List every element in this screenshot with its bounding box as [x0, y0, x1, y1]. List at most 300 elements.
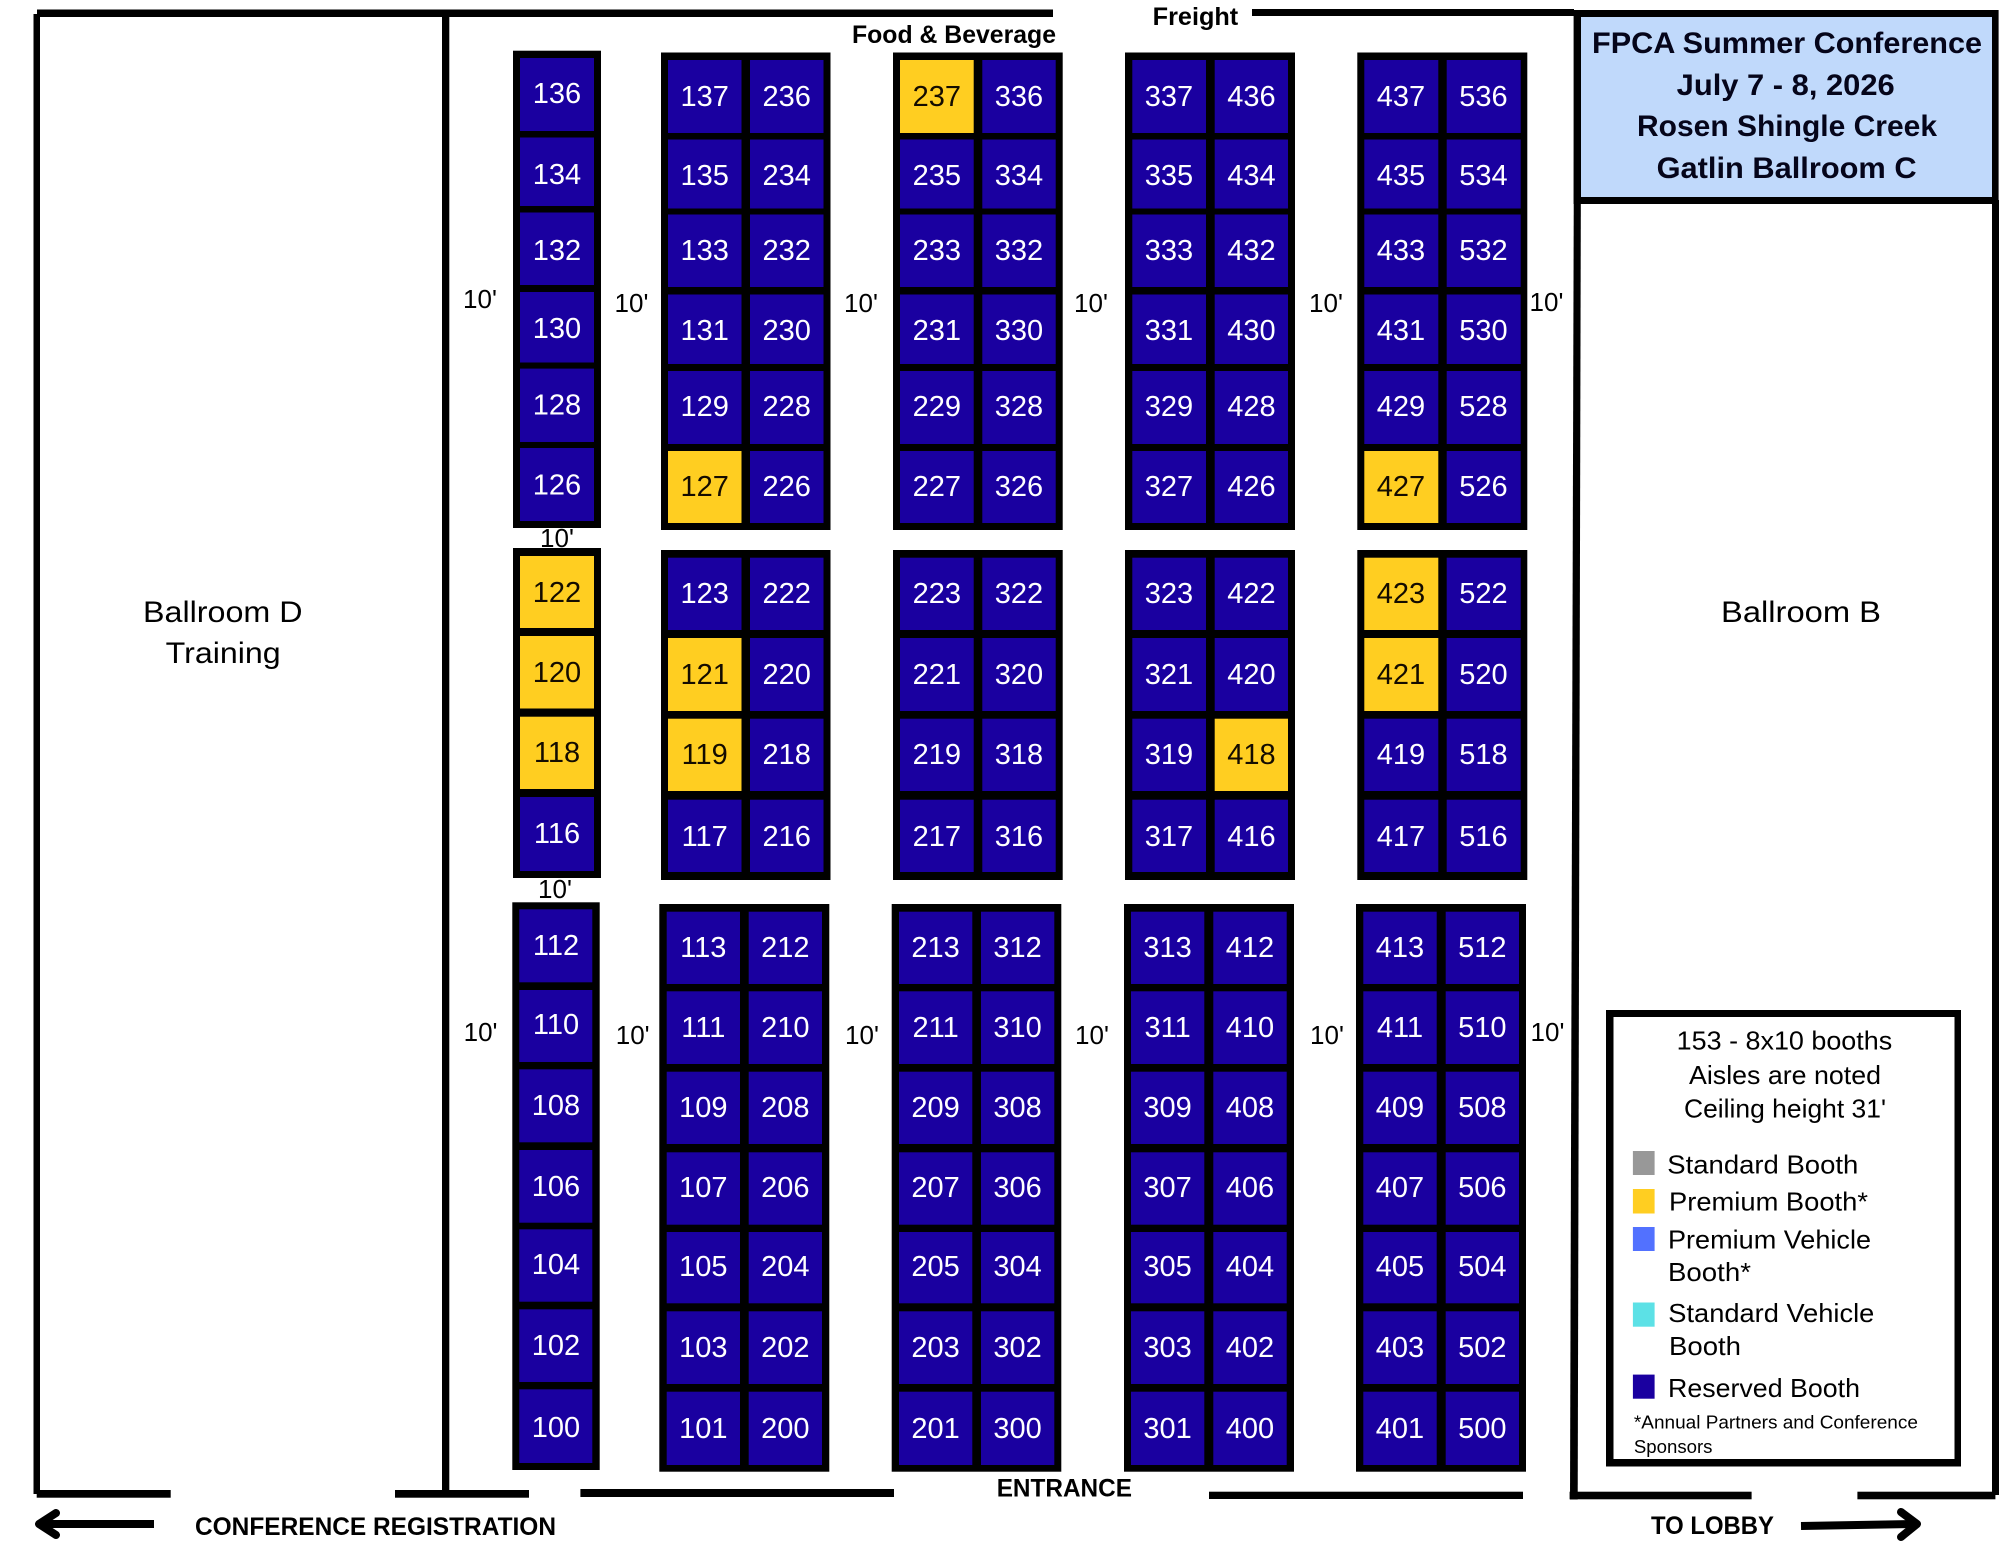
booth 337: 337 — [1145, 81, 1193, 113]
booth 235 — [900, 140, 974, 208]
booth 305: 305 — [1143, 1251, 1192, 1283]
booth block: top 3 — [1125, 52, 1295, 530]
aisle labels: 10' — [1531, 1017, 1564, 1047]
booth 312 — [981, 912, 1054, 984]
booth 506 — [1446, 1152, 1519, 1225]
booth 319 — [1132, 719, 1206, 791]
booth 327: 327 — [1145, 471, 1193, 503]
booth column: bottom single — [512, 902, 600, 1470]
booth 116 — [520, 797, 594, 871]
booth 322: 322 — [995, 578, 1043, 610]
booth 108 — [519, 1069, 592, 1142]
booth 222 — [750, 558, 824, 630]
booth 508: 508 — [1458, 1092, 1506, 1124]
booth 104 — [519, 1229, 592, 1302]
booth 220 — [750, 638, 824, 711]
booth 327 — [1132, 451, 1206, 523]
booth 510 — [1446, 991, 1519, 1064]
legend notes: 153 - 8x10 booths — [1677, 1026, 1892, 1056]
booth 307: 307 — [1143, 1172, 1192, 1204]
booth 432: 432 — [1227, 235, 1276, 267]
aisle labels: 10' — [538, 874, 572, 904]
booth 405: 405 — [1376, 1251, 1424, 1283]
booth 236 — [750, 60, 824, 133]
booth 331: 331 — [1145, 315, 1193, 347]
booth 409: 409 — [1376, 1092, 1424, 1124]
booth 528 — [1447, 371, 1521, 444]
booth 326: 326 — [995, 471, 1043, 503]
booth 134: 134 — [533, 159, 581, 191]
booth 504 — [1446, 1232, 1519, 1303]
booth 427 premium: 427 — [1377, 471, 1425, 503]
booth 200: 200 — [761, 1413, 809, 1445]
booth 526 — [1447, 451, 1521, 523]
booth 329: 329 — [1145, 391, 1193, 423]
booth 412 — [1213, 912, 1287, 984]
booth 528: 528 — [1459, 391, 1508, 423]
booth 305 — [1131, 1232, 1204, 1303]
booth 404 — [1213, 1232, 1287, 1303]
booth 106: 106 — [532, 1171, 580, 1203]
booth 331 — [1132, 294, 1206, 364]
booth 318: 318 — [995, 739, 1043, 771]
title line 3: Rosen Shingle Creek — [1637, 110, 1937, 143]
booth 431: 431 — [1377, 315, 1425, 347]
booth 518 — [1447, 719, 1521, 791]
booth 236: 236 — [763, 81, 811, 113]
booth 522: 522 — [1459, 578, 1508, 610]
booth 433 — [1364, 214, 1438, 287]
aisle labels: 10' — [463, 284, 497, 314]
booth 300 — [981, 1392, 1054, 1465]
booth block: bottom 3 — [1124, 904, 1294, 1472]
booth 417 — [1364, 800, 1438, 872]
title panel — [1574, 10, 1999, 204]
booth 136 — [520, 58, 594, 131]
booth 307 — [1131, 1152, 1204, 1225]
booth 111 — [667, 991, 740, 1064]
booth 427 premium — [1364, 451, 1438, 523]
booth 111: 111 — [681, 1012, 725, 1044]
booth 435: 435 — [1377, 160, 1425, 192]
booth 402 — [1213, 1311, 1287, 1384]
booth 421 premium: 421 — [1377, 659, 1425, 691]
booth 105: 105 — [679, 1251, 727, 1283]
booth 330: 330 — [995, 315, 1043, 347]
booth 227 — [900, 451, 974, 523]
legend item: standard vehicle booth — [1633, 1298, 1874, 1361]
booth 420: 420 — [1227, 659, 1276, 691]
booth 218 — [750, 719, 824, 791]
booth 534 — [1447, 140, 1521, 208]
booth 309: 309 — [1143, 1092, 1192, 1124]
booth 420 — [1215, 638, 1288, 711]
booth 135: 135 — [681, 160, 729, 192]
booth 320 — [982, 638, 1056, 711]
booth 403 — [1363, 1311, 1437, 1384]
legend panel — [1606, 1010, 1961, 1466]
booth 534: 534 — [1459, 160, 1508, 192]
booth 334 — [982, 140, 1056, 208]
booth 401: 401 — [1376, 1413, 1424, 1445]
booth 234 — [750, 140, 824, 208]
booth 212 — [749, 912, 822, 984]
booth block: bottom 4 — [1356, 904, 1526, 1472]
booth block: bottom 2 — [892, 904, 1061, 1472]
booth 416 — [1215, 800, 1288, 872]
booth 120 premium: 120 — [533, 657, 581, 689]
booth 103: 103 — [679, 1332, 727, 1364]
booth 312: 312 — [993, 932, 1042, 964]
booth 126: 126 — [533, 470, 581, 502]
booth 200 — [749, 1392, 822, 1465]
booth 316 — [982, 800, 1056, 872]
booth 313 — [1131, 912, 1204, 984]
booth 223: 223 — [913, 578, 961, 610]
booth 516 — [1447, 800, 1521, 872]
booth 335: 335 — [1145, 160, 1193, 192]
booth 333: 333 — [1145, 235, 1193, 267]
booth 205 — [899, 1232, 972, 1303]
booth 401 — [1363, 1392, 1437, 1465]
booth 400: 400 — [1226, 1413, 1274, 1445]
booth 526: 526 — [1459, 471, 1508, 503]
booth column: middle single — [513, 548, 601, 878]
booth 216 — [750, 800, 824, 872]
booth 326 — [982, 451, 1056, 523]
booth block: middle 3 — [1125, 550, 1295, 880]
booth 434: 434 — [1227, 160, 1276, 192]
booth 434 — [1215, 140, 1288, 208]
booth block: middle 1 — [661, 550, 830, 880]
booth 137 — [668, 60, 742, 133]
booth 428: 428 — [1227, 391, 1276, 423]
arrow: to lobby — [1801, 1512, 1917, 1537]
booth 219: 219 — [913, 739, 961, 771]
booth 107: 107 — [679, 1172, 727, 1204]
booth 334: 334 — [995, 160, 1043, 192]
legend footnote: Sponsors — [1634, 1437, 1712, 1457]
booth 302: 302 — [993, 1332, 1042, 1364]
aisle labels: 10' — [1530, 287, 1563, 317]
booth 502 — [1446, 1311, 1519, 1384]
booth 330 — [982, 294, 1056, 364]
booth 121 premium: 121 — [681, 659, 729, 691]
booth 209: 209 — [911, 1092, 960, 1124]
booth block: middle 4 — [1357, 550, 1527, 880]
booth 404: 404 — [1226, 1251, 1274, 1283]
booth 132 — [520, 212, 594, 285]
booth 207: 207 — [911, 1172, 960, 1204]
booth 512: 512 — [1458, 932, 1506, 964]
booth 303 — [1131, 1311, 1204, 1384]
booth 522 — [1447, 558, 1521, 630]
booth 101 — [667, 1392, 740, 1465]
label: Ballroom D Training: Training — [166, 637, 281, 670]
booth 128 — [520, 369, 594, 442]
booth 230: 230 — [763, 315, 811, 347]
booth 216: 216 — [763, 821, 811, 853]
booth 308: 308 — [993, 1092, 1042, 1124]
booth 335 — [1132, 140, 1206, 208]
booth 130: 130 — [533, 313, 581, 345]
booth 403: 403 — [1376, 1332, 1424, 1364]
booth 211: 211 — [912, 1012, 959, 1044]
booth 313: 313 — [1143, 932, 1192, 964]
booth 229 — [900, 371, 974, 444]
legend item: premium vehicle booth — [1633, 1224, 1871, 1287]
aisle labels: 10' — [616, 1020, 650, 1050]
booth 119 premium: 119 — [682, 739, 728, 771]
label: to lobby: TO LOBBY — [1651, 1512, 1774, 1540]
legend item: reserved booth: Reserved Booth — [1668, 1373, 1860, 1403]
booth 229: 229 — [913, 391, 961, 423]
booth 300: 300 — [993, 1413, 1042, 1445]
booth 222: 222 — [763, 578, 811, 610]
booth 319: 319 — [1145, 739, 1193, 771]
legend notes: Ceiling height 31' — [1684, 1094, 1886, 1124]
booth 530: 530 — [1459, 315, 1508, 347]
booth 208: 208 — [761, 1092, 809, 1124]
booth 317: 317 — [1145, 821, 1193, 853]
booth 219 — [900, 719, 974, 791]
booth 202: 202 — [761, 1332, 809, 1364]
booth 116: 116 — [534, 818, 580, 850]
booth 122 premium: 122 — [533, 577, 581, 609]
booth 419 — [1364, 719, 1438, 791]
booth 228: 228 — [763, 391, 811, 423]
booth 422: 422 — [1227, 578, 1276, 610]
booth 323: 323 — [1145, 578, 1193, 610]
booth 308 — [981, 1072, 1054, 1144]
booth 133: 133 — [681, 235, 729, 267]
legend item: premium vehicle booth: Premium Vehicle — [1668, 1224, 1871, 1254]
booth 221: 221 — [913, 659, 961, 691]
booth 402: 402 — [1226, 1332, 1274, 1364]
booth 336: 336 — [995, 81, 1043, 113]
booth 132: 132 — [533, 235, 581, 267]
booth 321 — [1132, 638, 1206, 711]
booth 123 — [668, 558, 742, 630]
legend item: standard vehicle booth: Booth — [1669, 1331, 1741, 1361]
booth 235: 235 — [913, 160, 961, 192]
booth 118 premium — [520, 717, 594, 789]
booth 120 premium — [520, 636, 594, 708]
booth 102: 102 — [532, 1330, 580, 1362]
booth 532 — [1447, 214, 1521, 287]
title line 4: Gatlin Ballroom C — [1657, 152, 1917, 185]
booth 304 — [981, 1232, 1054, 1303]
legend notes: Aisles are noted — [1689, 1060, 1881, 1090]
booth 301 — [1131, 1392, 1204, 1465]
legend item: standard vehicle booth: Standard Vehicle — [1668, 1298, 1874, 1328]
label: conference registration: CONFERENCE REGISTRATION — [195, 1513, 556, 1541]
booth 128: 128 — [533, 390, 581, 422]
booth 201 — [899, 1392, 972, 1465]
aisle labels: 10' — [1074, 288, 1108, 318]
booth 429 — [1364, 371, 1438, 444]
booth 409 — [1363, 1072, 1437, 1144]
booth 432 — [1215, 214, 1288, 287]
booth 406: 406 — [1226, 1172, 1274, 1204]
label: ENTRANCE: ENTRANCE — [997, 1475, 1132, 1503]
booth 220: 220 — [763, 659, 811, 691]
booth 135 — [668, 140, 742, 208]
booth block: top 4 — [1357, 52, 1527, 530]
booth 428 — [1215, 371, 1288, 444]
booth 109 — [667, 1072, 740, 1144]
booth 129 — [668, 371, 742, 444]
booth 231: 231 — [913, 315, 961, 347]
booth 108: 108 — [532, 1090, 580, 1122]
booth 107 — [667, 1152, 740, 1225]
booth 311 — [1131, 991, 1204, 1064]
booth 336 — [982, 60, 1056, 133]
booth 127 premium — [668, 451, 742, 523]
booth 431 — [1364, 294, 1438, 364]
booth 520 — [1447, 638, 1521, 711]
booth 311: 311 — [1144, 1012, 1191, 1044]
booth 407 — [1363, 1152, 1437, 1225]
booth 405 — [1363, 1232, 1437, 1303]
aisle labels: 10' — [1309, 288, 1343, 318]
booth 213: 213 — [911, 932, 960, 964]
booth 209 — [899, 1072, 972, 1144]
booth 112: 112 — [533, 930, 579, 962]
booth 232: 232 — [763, 235, 811, 267]
booth 410 — [1213, 991, 1287, 1064]
booth 323 — [1132, 558, 1206, 630]
booth 126 — [520, 448, 594, 521]
booth 129: 129 — [681, 391, 729, 423]
booth 411 — [1363, 991, 1437, 1064]
booth 410: 410 — [1226, 1012, 1274, 1044]
booth 301: 301 — [1143, 1413, 1192, 1445]
aisle labels: 10' — [845, 1020, 879, 1050]
booth 121 premium — [668, 638, 742, 711]
legend item: standard booth: Standard Booth — [1667, 1150, 1858, 1180]
booth 506: 506 — [1458, 1172, 1506, 1204]
booth 536: 536 — [1459, 81, 1508, 113]
booth 207 — [899, 1152, 972, 1225]
booth 426 — [1215, 451, 1288, 523]
booth 413 — [1363, 912, 1437, 984]
booth column: top single — [513, 51, 601, 528]
booth 204: 204 — [761, 1251, 809, 1283]
booth 407: 407 — [1376, 1172, 1424, 1204]
booth 418 premium: 418 — [1227, 739, 1276, 771]
booth block: top 2 — [893, 52, 1063, 530]
booth 117 — [668, 800, 742, 872]
booth 211 — [899, 991, 972, 1064]
booth 202 — [749, 1311, 822, 1384]
booth 532: 532 — [1459, 235, 1508, 267]
booth 508 — [1446, 1072, 1519, 1144]
booth 217 — [900, 800, 974, 872]
booth 231 — [900, 294, 974, 364]
booth 117: 117 — [682, 821, 728, 853]
booth block: middle 2 — [893, 550, 1063, 880]
label: Food & Beverage: Food & Beverage — [852, 21, 1056, 49]
booth 110 — [519, 990, 592, 1062]
booth 321: 321 — [1145, 659, 1193, 691]
booth 136: 136 — [533, 78, 581, 110]
booth 416: 416 — [1227, 821, 1276, 853]
booth 320: 320 — [995, 659, 1043, 691]
booth 110: 110 — [533, 1009, 579, 1041]
aisle labels: 10' — [1075, 1020, 1109, 1050]
booth 113: 113 — [680, 932, 726, 964]
booth 112 — [519, 909, 592, 982]
legend notes — [1677, 1026, 1892, 1124]
booth 536 — [1447, 60, 1521, 133]
booth 217: 217 — [913, 821, 961, 853]
aisle labels: 10' — [844, 288, 878, 318]
booth 423 premium — [1364, 558, 1438, 630]
booth 133 — [668, 214, 742, 287]
booth 101: 101 — [679, 1413, 727, 1445]
booth 210 — [749, 991, 822, 1064]
booth 510: 510 — [1458, 1012, 1506, 1044]
aisle labels: 10' — [615, 288, 648, 318]
legend footnote — [1634, 1413, 1918, 1457]
booth 423 premium: 423 — [1377, 578, 1425, 610]
booth 204 — [749, 1232, 822, 1303]
booth 412: 412 — [1226, 932, 1274, 964]
booth 422 — [1215, 558, 1288, 630]
booth 332 — [982, 214, 1056, 287]
booth 232 — [750, 214, 824, 287]
booth 436 — [1215, 60, 1288, 133]
booth 408 — [1213, 1072, 1287, 1144]
booth 210: 210 — [761, 1012, 809, 1044]
booth 130 — [520, 292, 594, 362]
booth 504: 504 — [1458, 1251, 1506, 1283]
booth 437 — [1364, 60, 1438, 133]
booth 322 — [982, 558, 1056, 630]
arrow: to conference registration — [39, 1513, 154, 1535]
booth 102 — [519, 1309, 592, 1382]
label: Ballroom B: Ballroom B — [1721, 596, 1881, 629]
booth 337 — [1132, 60, 1206, 133]
booth 332: 332 — [995, 235, 1043, 267]
booth 306 — [981, 1152, 1054, 1225]
legend item: premium booth: Premium Booth* — [1669, 1187, 1868, 1217]
booth 433: 433 — [1377, 235, 1425, 267]
booth 413: 413 — [1376, 932, 1424, 964]
booth 500: 500 — [1458, 1413, 1506, 1445]
booth 131: 131 — [681, 315, 729, 347]
booth 100: 100 — [532, 1412, 580, 1444]
booth 201: 201 — [911, 1413, 960, 1445]
label: Ballroom D Training: Ballroom D — [143, 596, 302, 629]
title line 2: July 7 - 8, 2026 — [1677, 69, 1895, 102]
aisle labels: 10' — [464, 1017, 498, 1047]
booth 218: 218 — [763, 739, 811, 771]
booth 500 — [1446, 1392, 1519, 1465]
booth 419: 419 — [1377, 739, 1425, 771]
booth 436: 436 — [1227, 81, 1276, 113]
booth 411: 411 — [1377, 1012, 1423, 1044]
booth 430: 430 — [1227, 315, 1276, 347]
booth 203 — [899, 1311, 972, 1384]
booth 406 — [1213, 1152, 1287, 1225]
legend item: premium vehicle booth: Booth* — [1668, 1257, 1751, 1287]
booth 105 — [667, 1232, 740, 1303]
booth 237 premium: 237 — [913, 81, 961, 113]
booth 329 — [1132, 371, 1206, 444]
booth 421 premium — [1364, 638, 1438, 711]
